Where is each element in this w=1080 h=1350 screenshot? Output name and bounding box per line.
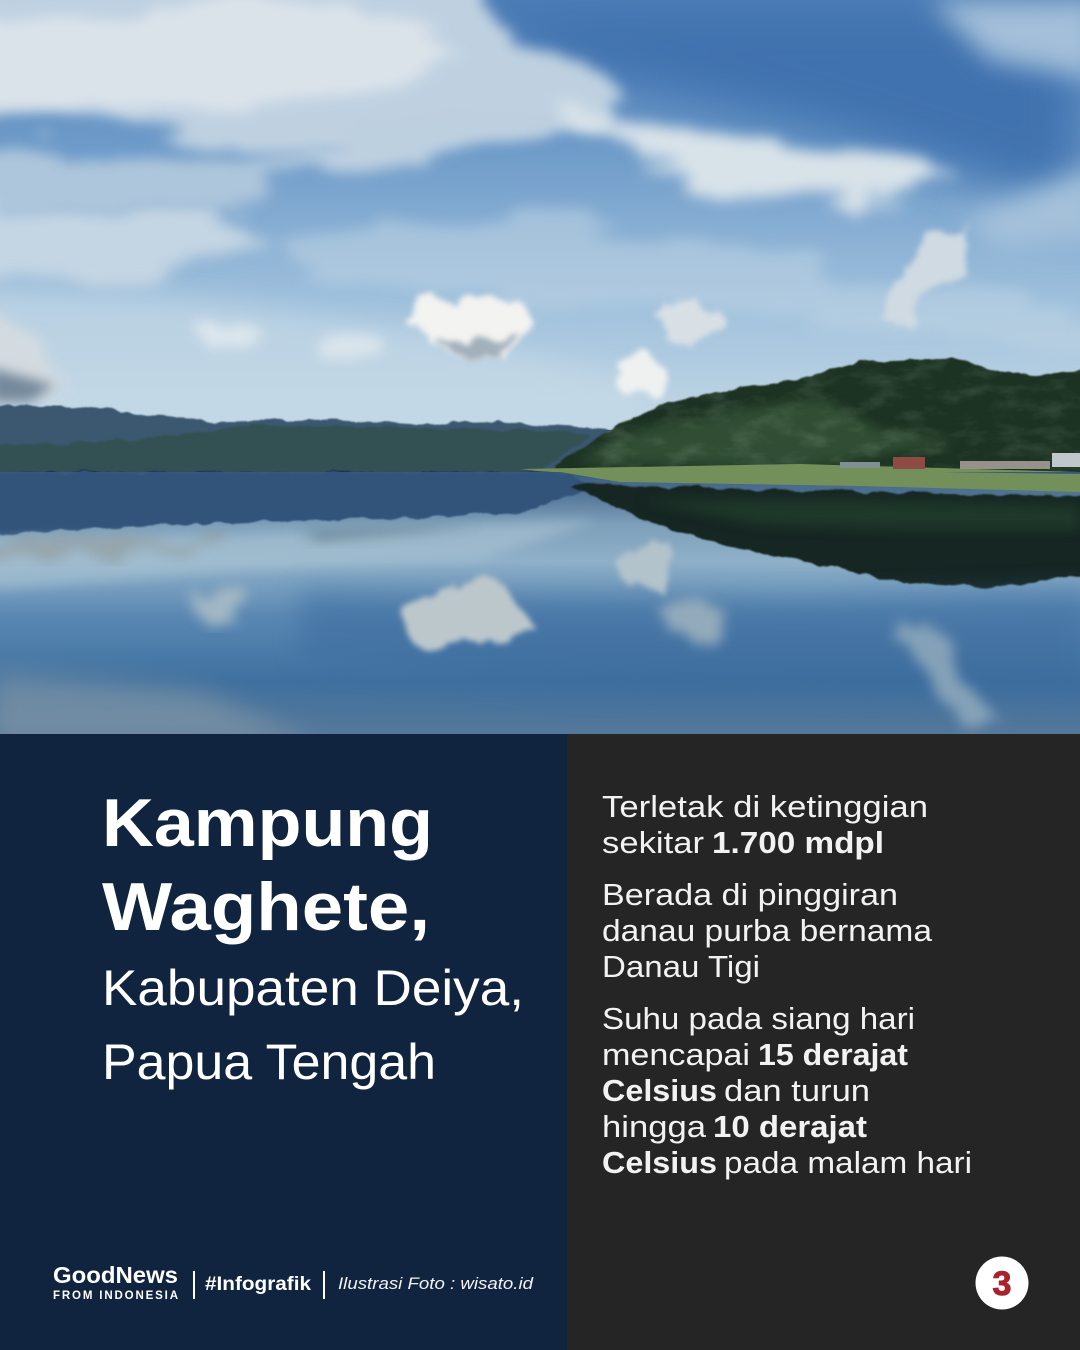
panel: title background <box>0 734 567 1350</box>
text block: altitude: sekitar <box>602 825 704 860</box>
text block: lake: Berada di pinggiran <box>602 877 898 912</box>
heading: Kampung Waghete: Waghete, <box>102 869 430 945</box>
text block: altitude: 1.700 mdpl <box>712 825 884 860</box>
text block: temperature: Suhu pada siang hari <box>602 1001 915 1036</box>
wispy clouds <box>0 0 1080 420</box>
shoreline with village <box>520 453 1080 472</box>
text block: temperature <box>602 1001 972 1180</box>
text block: temperature: pada malam hari <box>724 1145 972 1180</box>
text block: temperature: Celsius <box>602 1073 717 1108</box>
divider <box>193 1271 195 1299</box>
green shoreline strip <box>560 470 1080 492</box>
heading: Kampung Waghete: Kampung <box>102 785 433 861</box>
subheading: location: Kabupaten Deiya, <box>102 960 524 1016</box>
water surface shading <box>0 520 1080 744</box>
heading: Kampung Waghete <box>102 785 433 945</box>
green hill <box>555 358 1080 472</box>
forest texture <box>555 358 1080 472</box>
text block: temperature: 10 derajat <box>713 1109 867 1144</box>
subheading: location <box>102 960 524 1090</box>
text block: altitude: Terletak di ketinggian <box>602 789 928 824</box>
cloud reflections <box>190 538 1000 728</box>
panel: facts background <box>567 734 1080 1350</box>
divider <box>323 1271 325 1299</box>
subheading: location: Papua Tengah <box>102 1034 436 1090</box>
sky <box>0 0 1080 430</box>
page number badge <box>976 1256 1028 1310</box>
reflection of distant mountains <box>0 473 590 534</box>
lake water <box>0 472 1080 734</box>
text block: altitude <box>602 789 928 860</box>
photo credit: Ilustrasi Foto : wisato.id <box>338 1274 534 1293</box>
distant mountains <box>0 406 615 472</box>
text block: lake: danau purba bernama <box>602 913 933 948</box>
text block: temperature: 15 derajat <box>758 1037 908 1072</box>
text block: temperature: mencapai <box>602 1037 750 1072</box>
puffy clouds <box>0 226 968 402</box>
logo: GoodNews from Indonesia <box>53 1262 178 1302</box>
logo: GoodNews from Indonesia: GoodNews <box>53 1262 178 1288</box>
reflection of hill <box>570 484 1080 588</box>
logo: GoodNews from Indonesia: FROM INDONESIA <box>53 1290 178 1302</box>
text block: temperature: hingga <box>602 1109 707 1144</box>
text block: temperature: Celsius <box>602 1145 717 1180</box>
text block: lake <box>602 877 933 984</box>
text block: temperature: dan turun <box>724 1073 870 1108</box>
text block: lake: Danau Tigi <box>602 949 760 984</box>
photo: lake with sky and mountains <box>0 0 1080 744</box>
deep blue upper right sky <box>495 0 1080 206</box>
hashtag: #Infografik <box>205 1274 311 1295</box>
page number badge: 3 <box>993 1265 1011 1303</box>
